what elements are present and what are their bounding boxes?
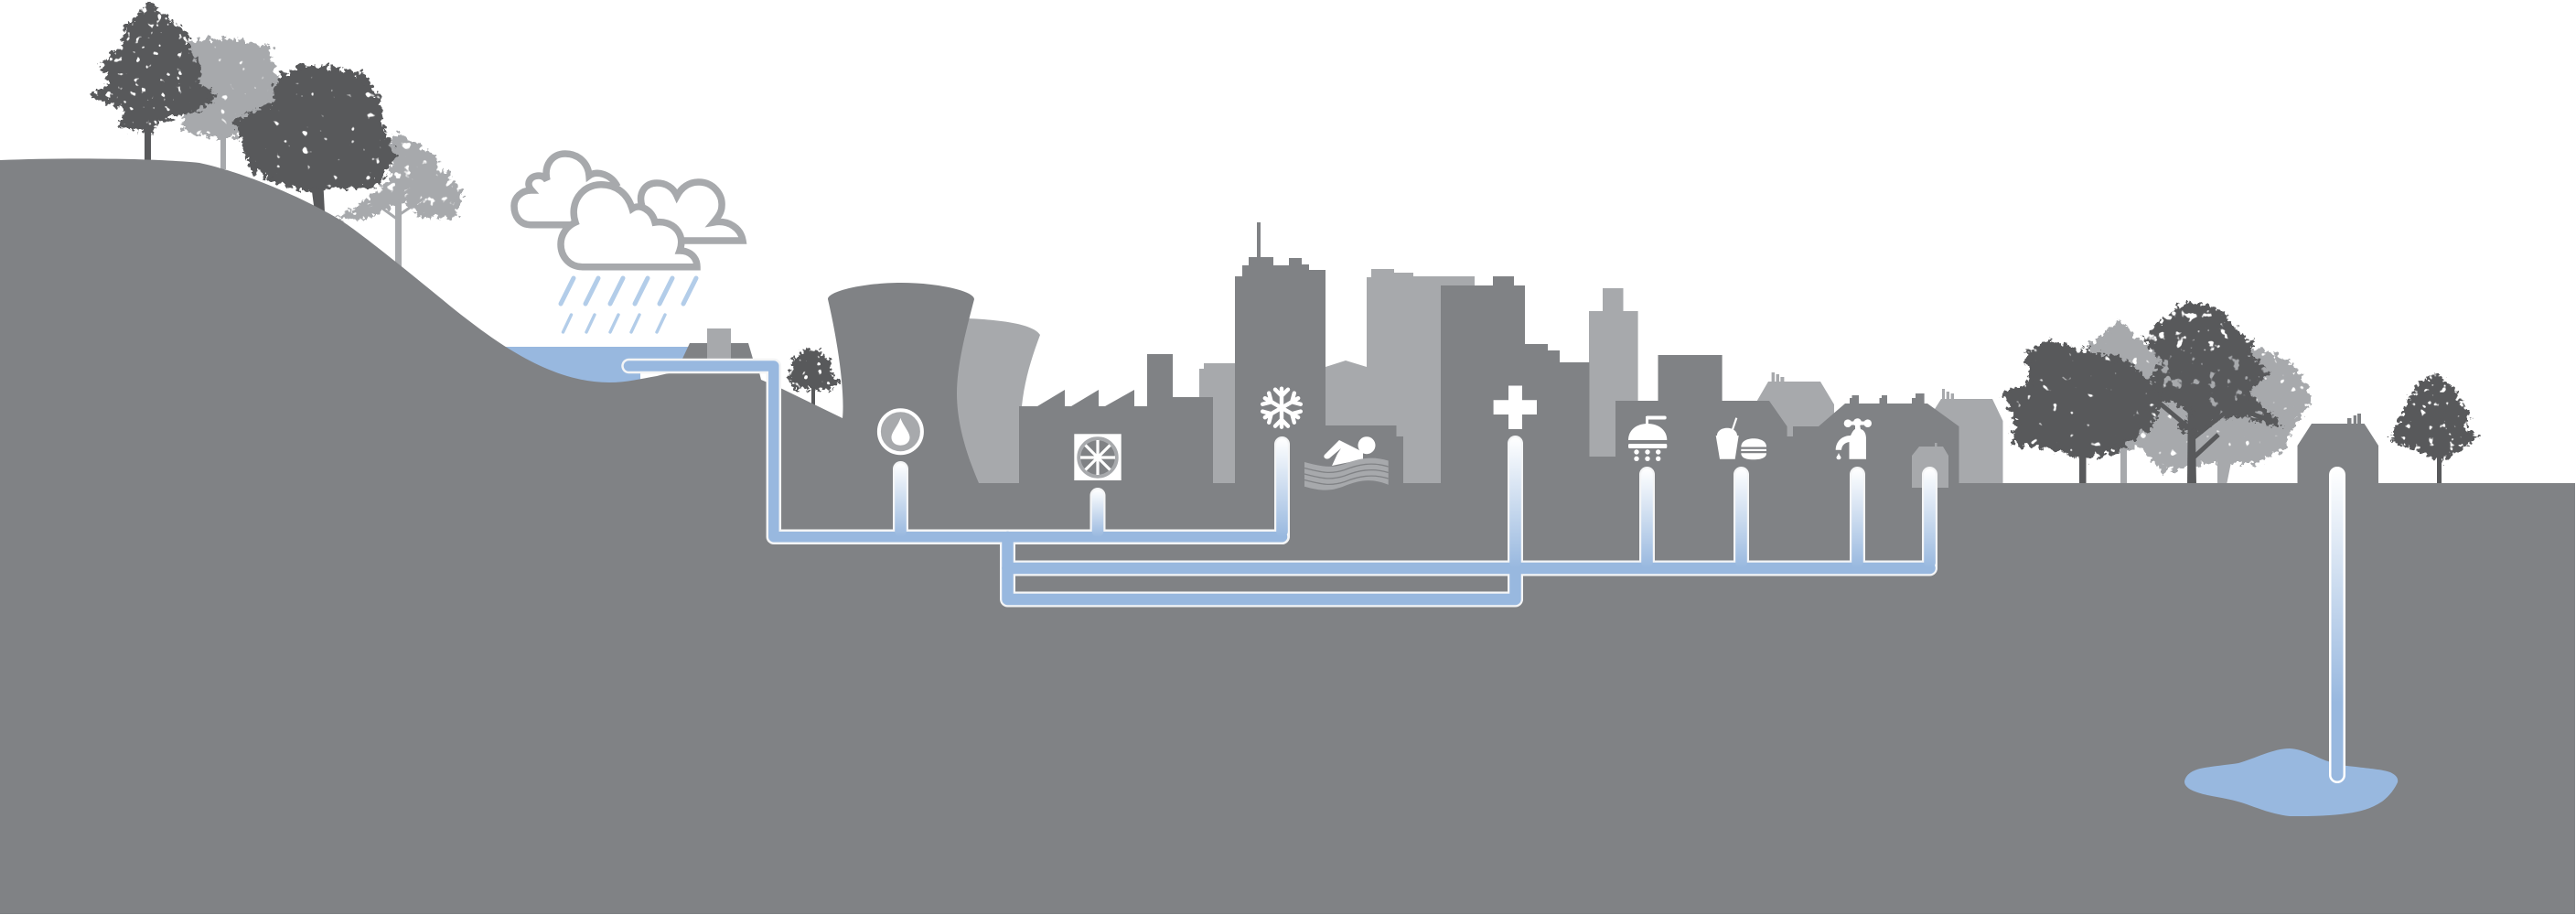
tree: light tree behind pine	[183, 40, 278, 169]
tree: light tree group	[2090, 321, 2311, 485]
buildings: light skyline behind the city	[1199, 269, 2003, 485]
small tree by the cooling tower	[789, 349, 839, 406]
icon: front cloud	[561, 185, 697, 267]
pipe: branch outlines	[893, 436, 1937, 607]
tree: dark broad tree	[2005, 341, 2163, 485]
trees on the hill	[92, 3, 460, 267]
icon: shower	[1628, 415, 1667, 461]
tree: tall dark pine	[2145, 302, 2280, 485]
pipe network	[629, 366, 1937, 607]
cooling tower, rear	[951, 318, 1040, 485]
reservoir water	[504, 347, 690, 389]
icon: back left cloud	[514, 154, 617, 225]
small house at end of pipe	[1912, 443, 1948, 488]
pipe: blue water channels	[629, 366, 1930, 599]
icon: drink and burger	[1716, 418, 1766, 459]
clouds and rain	[514, 154, 743, 332]
icon: tap	[1836, 418, 1872, 459]
tree: small dark pine	[2391, 374, 2476, 485]
dam	[682, 328, 753, 359]
icon: swimmer	[1304, 436, 1389, 490]
pipe: white outlines	[629, 366, 1930, 599]
rain: large drops	[561, 278, 696, 304]
trees at right	[2005, 302, 2476, 485]
tree: light sparse tree	[338, 134, 460, 267]
aquifer	[2184, 748, 2398, 816]
icon: snowflake	[1261, 389, 1302, 427]
icon: water drop	[879, 410, 922, 453]
tree: dark broad tree	[236, 66, 394, 212]
icon: hospital cross	[1494, 386, 1537, 429]
well pipe	[2329, 467, 2345, 783]
icon: back right cloud	[641, 182, 743, 241]
rain: small drops	[564, 315, 665, 332]
tree: dark pine	[92, 3, 216, 163]
pipe: fading branch channels	[895, 437, 1936, 568]
icon: cooling fan	[1074, 434, 1122, 480]
